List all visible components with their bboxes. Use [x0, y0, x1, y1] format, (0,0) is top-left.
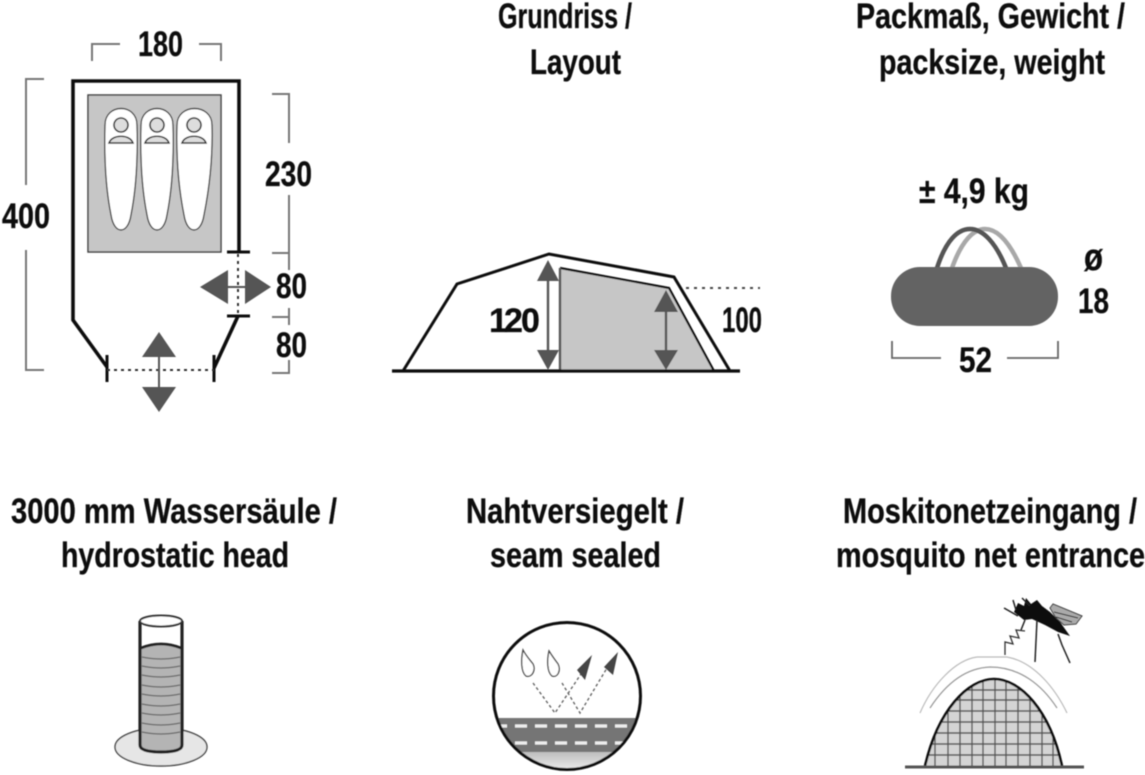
tent outline	[73, 81, 239, 368]
dotted openings	[107, 254, 238, 370]
inner tent floor	[88, 95, 221, 252]
splash paths	[533, 663, 610, 713]
deflect arrows	[577, 655, 592, 680]
circle outline	[494, 622, 640, 770]
diameter symbol: ø	[1084, 237, 1104, 279]
heading: hydrostatic head: 3000 mm Wassersäule /	[11, 492, 337, 531]
dimension: 100: 100	[722, 301, 762, 340]
scale rings	[142, 657, 180, 734]
floor plan dimension brackets	[26, 44, 289, 373]
mesh grid	[928, 679, 1059, 766]
side door arrow	[200, 270, 271, 304]
dome outline	[925, 679, 1062, 766]
icon: seam sealed	[490, 622, 645, 772]
sleeper heads	[109, 118, 206, 143]
heading: seam sealed: seam sealed	[490, 536, 661, 575]
dimension: 180: 180	[138, 25, 183, 64]
icon: mosquito net dome	[905, 598, 1084, 770]
weight label: ± 4,9 kg	[919, 172, 1029, 211]
mosquito	[1004, 598, 1082, 663]
dimension: 80 side: 80	[276, 267, 307, 306]
base disc	[115, 728, 207, 766]
ground line	[905, 766, 1084, 768]
height arrow 120	[537, 260, 559, 370]
heading: pack size and weight	[856, 0, 1125, 82]
water	[141, 644, 181, 751]
height arrow 100	[654, 290, 678, 370]
panel: floor plan	[2, 25, 312, 412]
ground line	[392, 369, 740, 373]
heading: seam sealed	[466, 492, 684, 575]
panel: side layout	[392, 254, 762, 371]
dotted height line	[686, 287, 760, 289]
dimension: 18: 18	[1078, 282, 1109, 321]
water drops	[522, 650, 534, 676]
deflection arcs	[920, 657, 1067, 713]
door markers	[107, 252, 250, 382]
dimension: 230: 230	[265, 155, 312, 194]
dimension: 400: 400	[2, 197, 50, 236]
icon: water column	[115, 616, 207, 766]
bag body	[891, 267, 1058, 326]
heading: hydrostatic head: hydrostatic head	[61, 536, 289, 575]
front door arrow	[142, 332, 176, 412]
inner tent section	[560, 268, 714, 371]
dimension: 80 front: 80	[276, 326, 307, 365]
heading: layout	[498, 0, 632, 82]
panel: pack bag	[891, 172, 1109, 380]
glass	[140, 621, 182, 752]
sleeping bags	[105, 108, 212, 230]
zigzag impact	[1005, 630, 1025, 655]
fabric layers	[498, 717, 636, 769]
heading: layout: Layout	[530, 43, 621, 82]
outer tent outline	[403, 254, 730, 371]
mesh fill	[925, 679, 1062, 766]
heading: mosquito net entrance	[836, 492, 1145, 575]
heading: hydrostatic head	[11, 492, 337, 575]
dimension: 120: 120	[489, 302, 540, 340]
dimension: 52: 52	[959, 341, 992, 380]
heading: seam sealed: Nahtversiegelt /	[466, 492, 684, 531]
bag handles	[952, 229, 1021, 268]
length bracket	[892, 341, 1058, 358]
